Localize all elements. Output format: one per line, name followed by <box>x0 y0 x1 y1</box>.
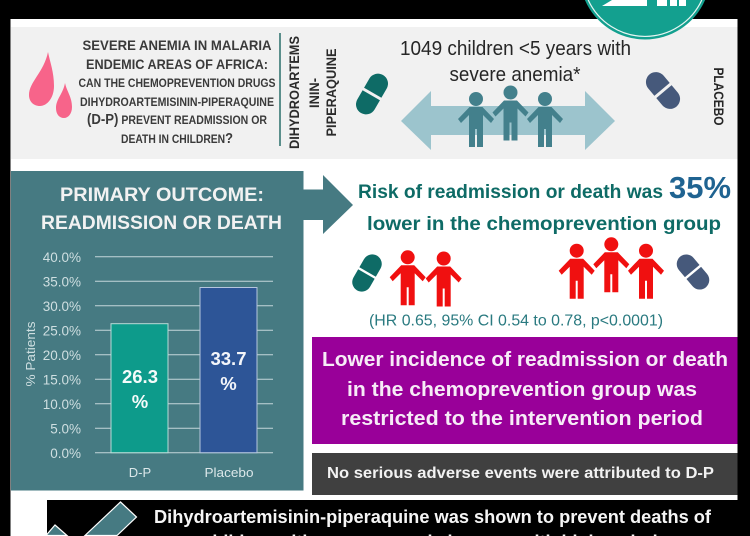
heading: study question: ENDEMIC AREAS OF AFRICA: <box>86 56 268 72</box>
bar chart: 0.0% <box>50 446 81 461</box>
icon: check mark <box>46 502 136 536</box>
heading: study question: DEATH IN CHILDREN? <box>121 130 233 147</box>
bar chart: 40.0% <box>43 250 81 265</box>
heading: risk result: Risk of readmission or death was <box>358 182 663 203</box>
label: drug arm <box>286 36 339 149</box>
icon: teal badge <box>585 0 705 39</box>
label: drug arm: PIPERAQUINE <box>323 48 339 136</box>
text: participants: severe anemia* <box>450 64 581 86</box>
bar: D-P <box>111 324 168 453</box>
icon: placebo pill small <box>670 248 716 296</box>
callout: intervention period: in the chemoprevention group was <box>347 379 697 401</box>
bar chart: 30.0% <box>43 299 81 314</box>
heading: study question <box>78 37 276 147</box>
bar chart: 15.0% <box>43 372 81 388</box>
heading: primary outcome <box>41 184 282 234</box>
icon: drug pill <box>351 69 393 119</box>
bar chart: 10.0% <box>43 397 81 412</box>
text: participants: 1049 children <5 years with <box>400 38 631 60</box>
heading: primary outcome: READMISSION OR DEATH <box>41 212 282 234</box>
heading: study question: SEVERE ANEMIA IN MALARIA <box>82 37 272 53</box>
bar chart: D-P <box>129 465 151 480</box>
text: hazard ratio: (HR 0.65, 95% CI 0.54 to 0.78, p<0.0001) <box>369 312 663 330</box>
icon: three children <box>458 86 563 147</box>
panel: primary outcome <box>11 171 353 490</box>
text: conclusion first line: Dihydroartemisinin-piperaquine was shown to prevent deaths of <box>154 507 712 527</box>
arrow: to results <box>303 175 353 234</box>
icon: blood drops <box>29 52 72 118</box>
heading: risk result: lower in the chemoprevention group <box>367 214 721 235</box>
label: drug arm: ININ- <box>306 78 322 108</box>
icon: randomisation double arrow <box>401 91 615 150</box>
heading: study question: (D-P) PREVENT READMISSION OR <box>87 111 267 128</box>
bar: placebo <box>200 288 257 453</box>
heading: risk result: 35% <box>669 170 731 205</box>
heading: study question: CAN THE CHEMOPREVENTION DRUGS <box>78 76 276 90</box>
bar chart <box>23 250 273 480</box>
bar chart: 25.0% <box>43 324 81 338</box>
bar chart: % Patients <box>23 321 38 386</box>
text: participants <box>400 38 631 86</box>
callout: adverse events <box>312 453 738 495</box>
heading: study question: DIHYDROARTEMISININ-PIPERAQUINE <box>80 95 274 109</box>
callout: intervention period <box>312 337 738 444</box>
label: drug arm: DIHYDROARTEMS <box>286 36 302 149</box>
icon: drug pill small <box>346 249 388 297</box>
heading: primary outcome: PRIMARY OUTCOME: <box>60 184 264 206</box>
callout: intervention period: restricted to the intervention period <box>341 408 703 430</box>
bar chart: 5.0% <box>50 422 81 436</box>
label: placebo arm: PLACEBO <box>711 68 727 126</box>
bar chart: 35.0% <box>43 274 81 290</box>
icon: three children in red <box>559 237 664 299</box>
panel: main result <box>346 170 731 330</box>
callout: adverse events: No serious adverse events were attributed to D-P <box>327 465 714 482</box>
bar: D-P: 26.3 <box>122 366 158 387</box>
heading: risk result <box>358 170 731 235</box>
bar: D-P: % <box>132 391 148 412</box>
bar chart: Placebo <box>204 465 254 480</box>
icon: two children in red <box>390 250 462 306</box>
panel: study design band <box>11 27 738 159</box>
panel: conclusion <box>46 500 738 536</box>
bar chart: 20.0% <box>43 348 81 363</box>
top black banner <box>0 0 750 19</box>
icon: placebo pill <box>640 67 686 114</box>
bar: placebo: 33.7 <box>210 348 247 369</box>
callout: intervention period: Lower incidence of readmission or death <box>322 349 728 371</box>
bar: placebo: % <box>220 373 237 394</box>
